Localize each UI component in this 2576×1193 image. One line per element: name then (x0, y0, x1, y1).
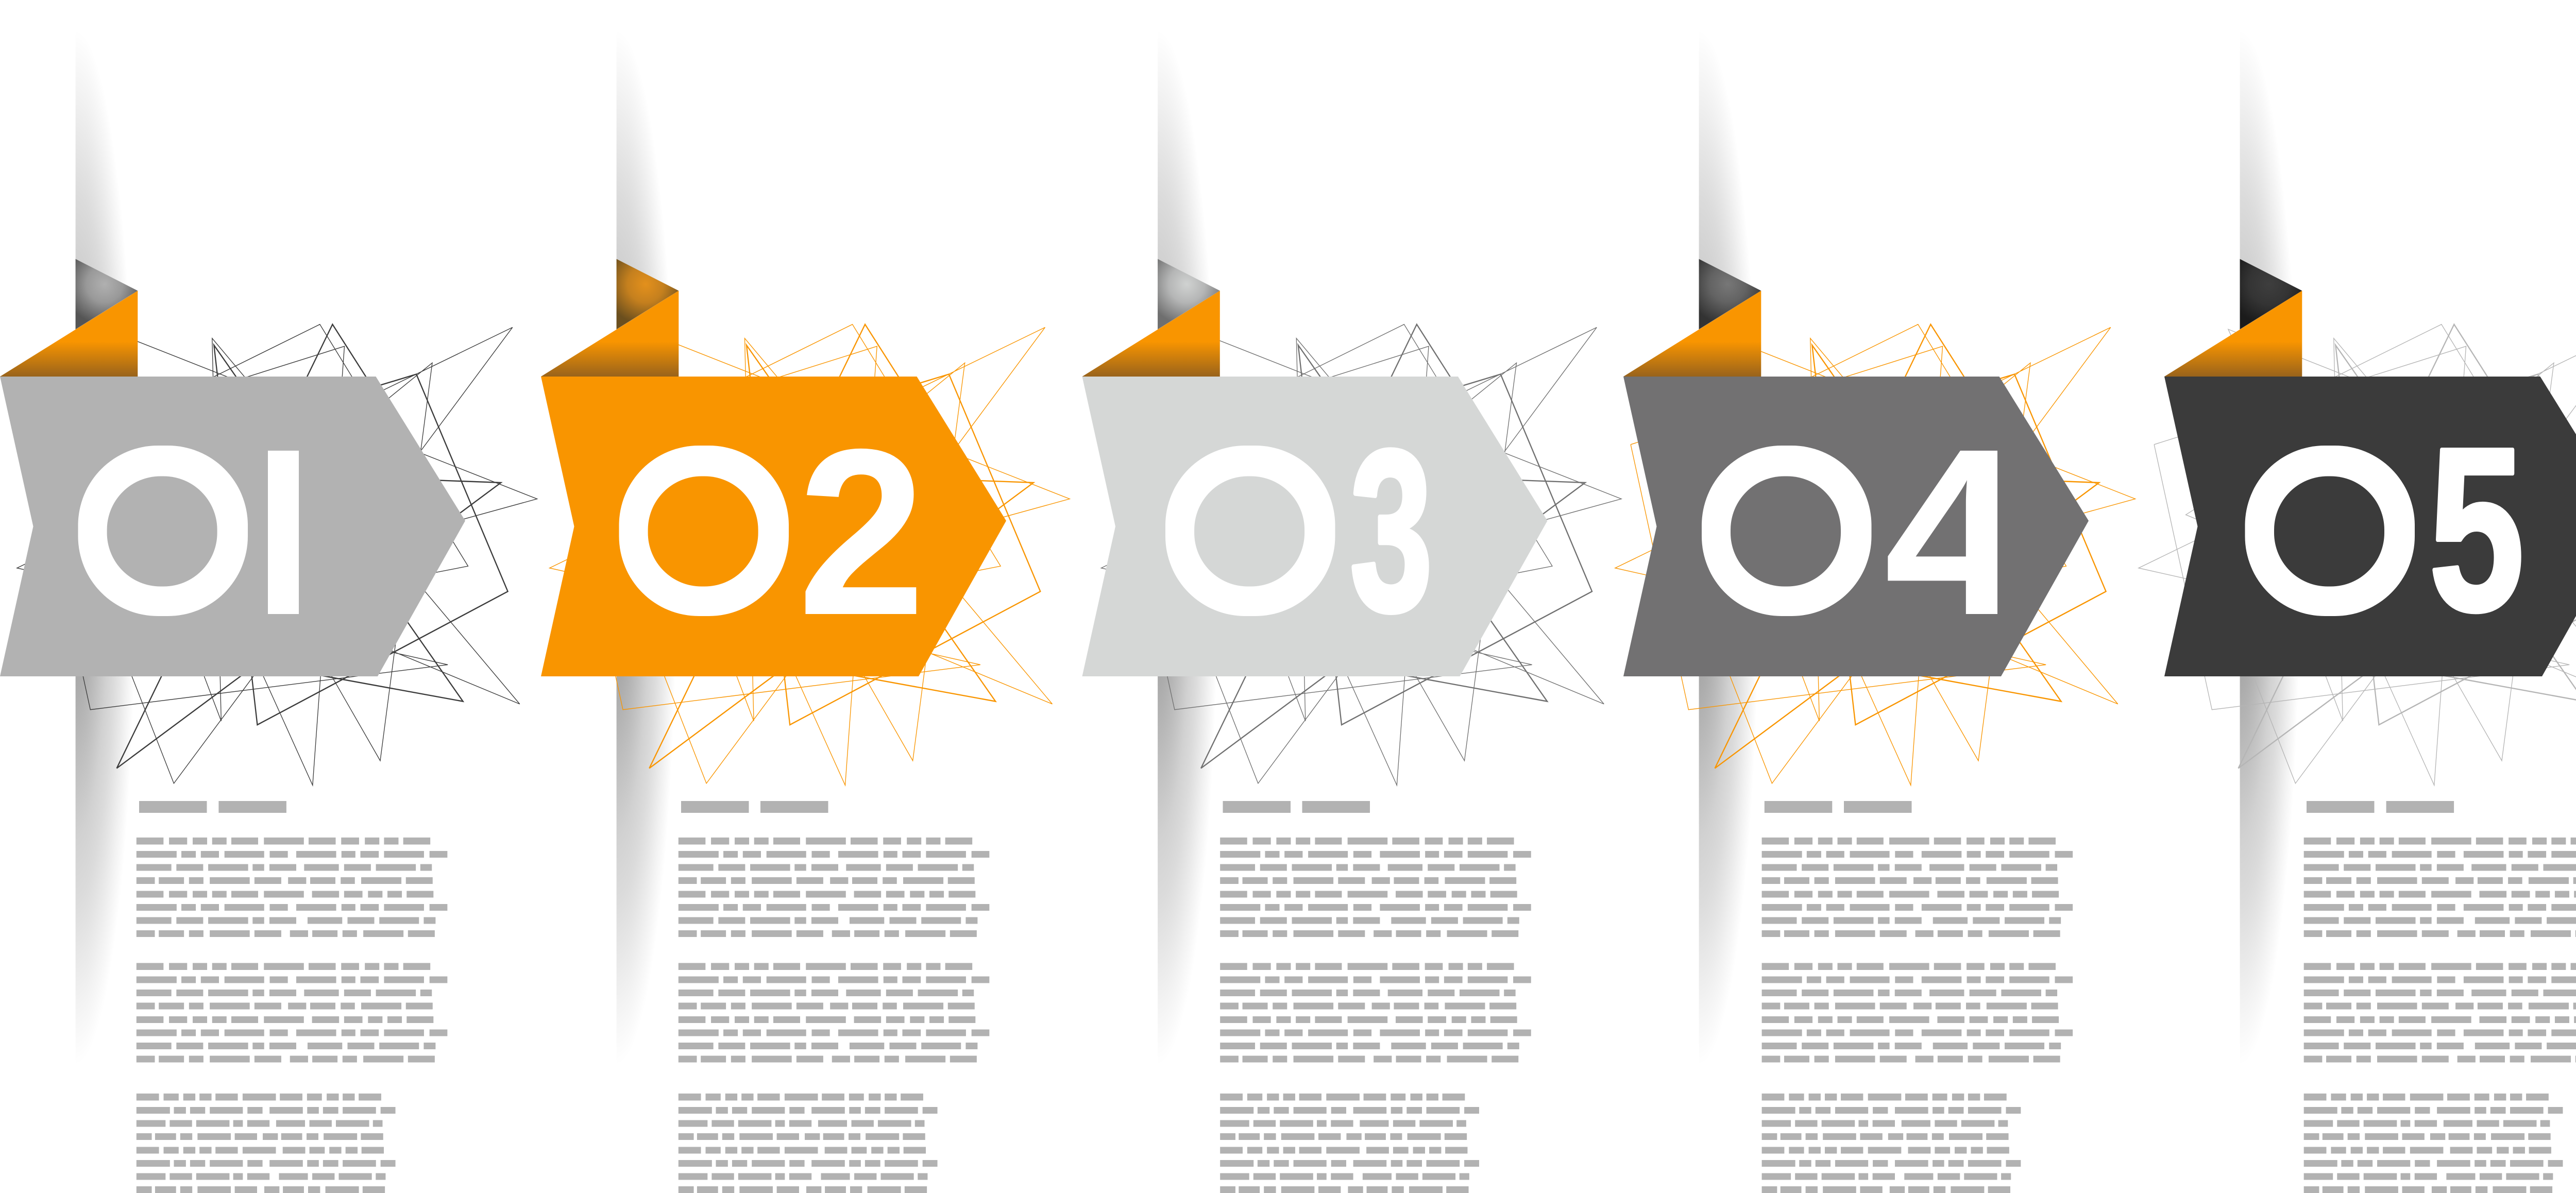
side shadow band (76, 30, 139, 1065)
orange ribbon fold (1082, 291, 1220, 377)
folded ribbon shadow triangle (1699, 259, 1761, 329)
number 04 (1702, 446, 1997, 616)
folded ribbon shadow triangle (1158, 259, 1220, 329)
side shadow band (617, 30, 680, 1065)
arrow banner (1082, 377, 1548, 676)
number 03: 3 (1350, 402, 1433, 659)
arrow banner (0, 377, 465, 676)
body text placeholder bars (1220, 838, 1531, 1193)
number 01 (78, 446, 299, 616)
side shadow band (2240, 30, 2303, 1065)
orange ribbon fold (1623, 291, 1761, 377)
star burst lines (2139, 325, 2576, 785)
number 04: 4 (1884, 400, 2024, 665)
body text placeholder bars (137, 838, 447, 1193)
heading placeholder bars (139, 801, 286, 813)
star burst lines (1101, 325, 1621, 785)
orange ribbon fold (541, 291, 679, 377)
folded ribbon shadow triangle (76, 259, 138, 329)
number 03 (1165, 446, 1429, 616)
panel: step 01 (0, 30, 537, 1193)
number 01: 0 (66, 400, 261, 662)
number 03: 0 (1153, 400, 1349, 662)
body text placeholder bars (2304, 838, 2576, 1193)
orange ribbon fold (2164, 291, 2302, 377)
body text placeholder bars (1762, 838, 2073, 1193)
heading placeholder bars (1223, 801, 1370, 813)
number 05 (2245, 446, 2521, 616)
number 02: 0 (607, 400, 802, 662)
arrow banner (2164, 377, 2576, 676)
side shadow band (1699, 30, 1762, 1065)
heading placeholder bars (2307, 801, 2454, 813)
number 02 (619, 446, 916, 616)
arrow banner (541, 377, 1006, 676)
heading placeholder bars (1765, 801, 1911, 813)
number 05: 0 (2233, 400, 2428, 662)
star burst lines (550, 325, 1070, 785)
number 05: 5 (2429, 400, 2524, 660)
side shadow band (1158, 30, 1221, 1065)
orange ribbon fold (0, 291, 138, 377)
folded ribbon shadow triangle (2240, 259, 2302, 329)
star burst lines (1615, 325, 2135, 785)
number 02: 2 (798, 400, 925, 664)
panel: step 05 (2139, 30, 2576, 1193)
arrow banner (1623, 377, 2089, 676)
panel: step 04 (1615, 30, 2135, 1193)
number 01: 1 (203, 399, 348, 664)
star burst lines (17, 325, 537, 785)
panel: step 02 (541, 30, 1070, 1193)
heading placeholder bars (681, 801, 828, 813)
body text placeholder bars (679, 838, 989, 1193)
folded ribbon shadow triangle (617, 259, 679, 329)
panel: step 03 (1082, 30, 1621, 1193)
number 04: 0 (1689, 400, 1885, 662)
